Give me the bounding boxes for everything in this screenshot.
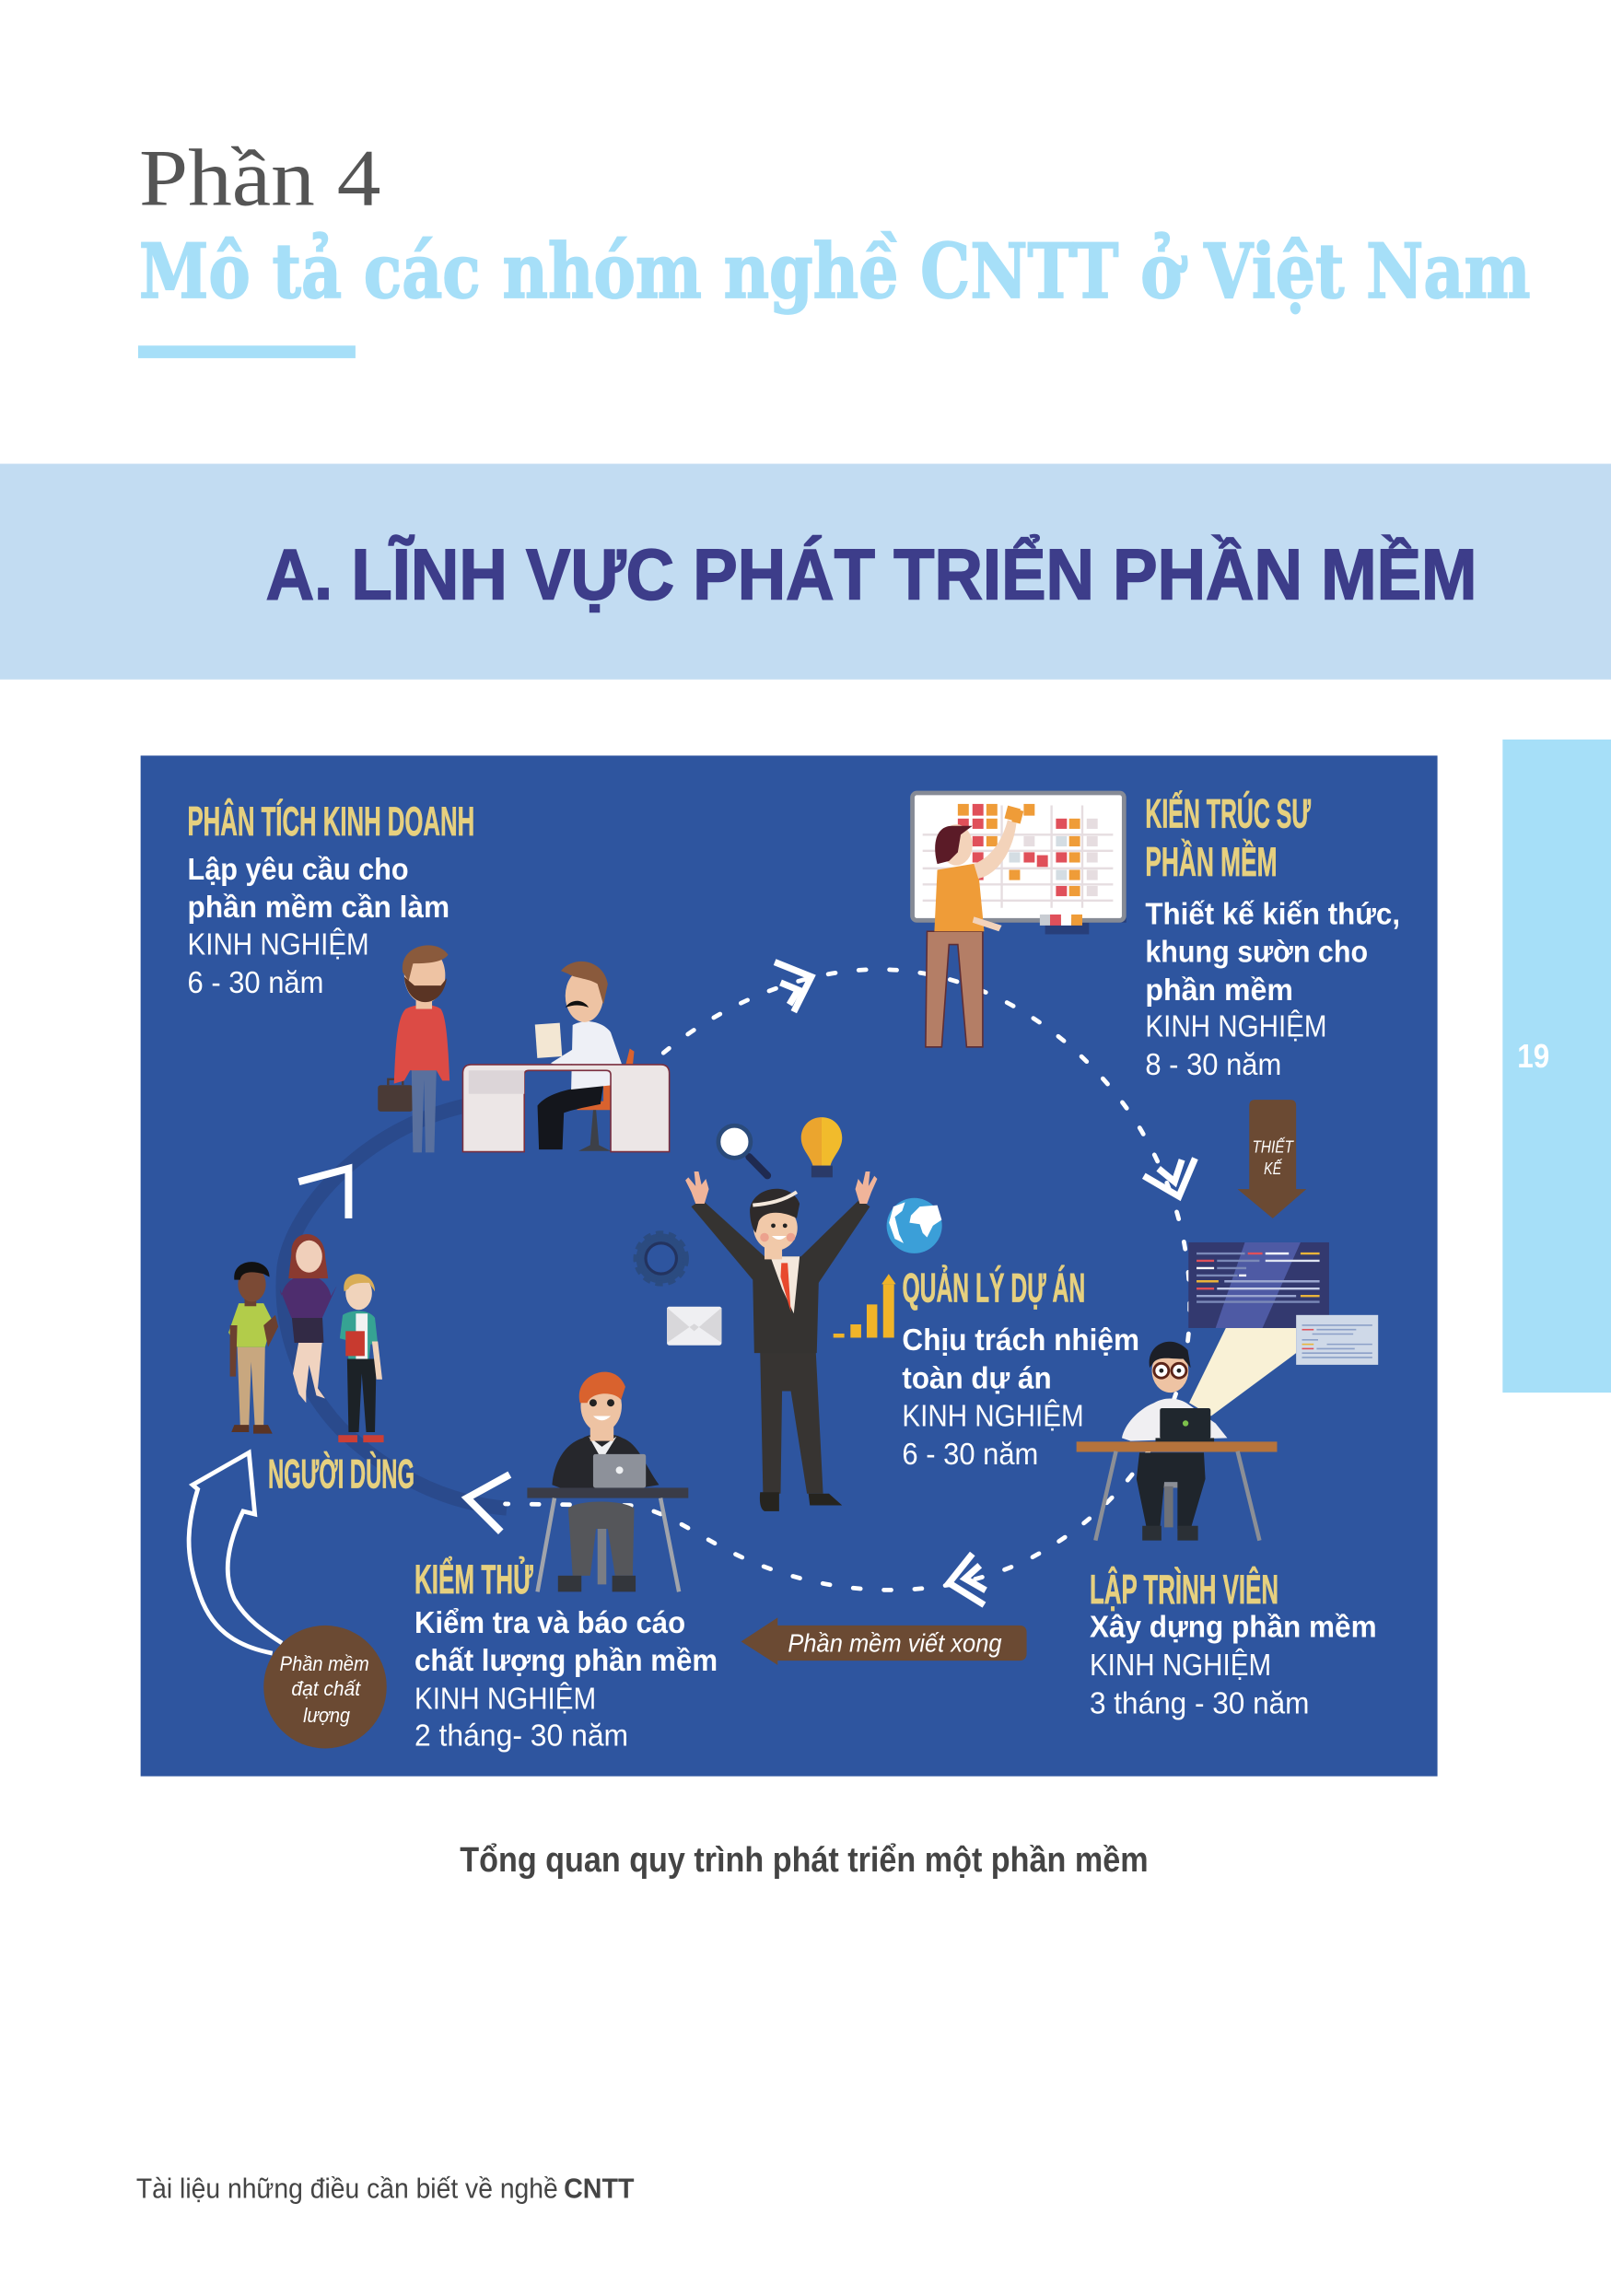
user: woman bbox=[280, 1234, 337, 1403]
whiteboard bbox=[913, 793, 1127, 934]
text block: programmer: 3 tháng - 30 năm bbox=[1090, 1686, 1309, 1720]
flow arrow: finished software bbox=[741, 1617, 1027, 1665]
programmer figure bbox=[1077, 1342, 1277, 1541]
caption: Tổng quan quy trình phát triển một phần mềm bbox=[460, 1840, 1149, 1880]
arrow label: THIẾT bbox=[1252, 1136, 1295, 1156]
user group figures bbox=[228, 1234, 384, 1442]
arrow: to architect bbox=[775, 962, 811, 1012]
text block: software architect: Thiết kế kiến thức, bbox=[1145, 897, 1400, 931]
icon: light bulb bbox=[801, 1117, 842, 1177]
text block: software architect: 8 - 30 năm bbox=[1145, 1048, 1281, 1082]
text block: programmer bbox=[1090, 1567, 1377, 1720]
curved outline arrow: quality software to users bbox=[189, 1452, 282, 1653]
text block: software architect: KINH NGHIỆM bbox=[1145, 1009, 1327, 1044]
text block: business analyst: phần mềm cần làm bbox=[188, 891, 449, 925]
text block: project manager: 6 - 30 năm bbox=[902, 1438, 1038, 1472]
dark arc: users to business analysis bbox=[283, 1105, 507, 1509]
page number tab bbox=[1502, 740, 1611, 1393]
project manager figure bbox=[685, 1171, 877, 1511]
icon: gear bbox=[636, 1233, 686, 1283]
badge: quality software bbox=[263, 1626, 387, 1748]
footer: Tài liệu những điều cần biết về nghề bbox=[136, 2174, 558, 2205]
text block: project manager: Chịu trách nhiệm bbox=[902, 1323, 1139, 1358]
tester figure bbox=[527, 1372, 688, 1591]
user: boy bbox=[338, 1274, 384, 1442]
code sheet bbox=[1296, 1315, 1378, 1365]
section band bbox=[0, 464, 1611, 680]
text block: software architect: KIẾN TRÚC SƯ bbox=[1145, 790, 1311, 836]
flow arrow label: Phần mềm viết xong bbox=[788, 1629, 1002, 1658]
footer: CNTT bbox=[564, 2174, 635, 2205]
arrow: to users bbox=[467, 1474, 509, 1532]
icon: magnifier bbox=[718, 1125, 767, 1175]
text block: software architect: phần mềm bbox=[1145, 973, 1293, 1008]
badge: quality software: đạt chất bbox=[291, 1677, 361, 1700]
text block: software architect bbox=[1145, 790, 1400, 1082]
text block: project manager: QUẢN LÝ DỰ ÁN bbox=[902, 1265, 1085, 1311]
title underline bbox=[138, 345, 356, 358]
text block: tester: KINH NGHIỆM bbox=[414, 1682, 596, 1717]
arrow: users to business analyst bbox=[298, 1169, 348, 1218]
design flow arrow: KẾ bbox=[1264, 1159, 1283, 1178]
text block: tester bbox=[414, 1556, 718, 1753]
dashed process cycle bbox=[506, 970, 1190, 1590]
process diagram panel bbox=[141, 755, 1438, 1777]
text block: business analyst: PHÂN TÍCH KINH DOANH bbox=[188, 798, 474, 845]
page number: 19 bbox=[1517, 1037, 1549, 1075]
white desk bbox=[462, 1065, 670, 1152]
text block: business analyst: KINH NGHIỆM bbox=[188, 927, 369, 962]
text block: project manager bbox=[902, 1265, 1139, 1472]
analyst chair bbox=[577, 1048, 634, 1110]
text block: tester: Kiểm tra và báo cáo bbox=[414, 1606, 685, 1640]
badge: quality software: lượng bbox=[303, 1704, 351, 1727]
text block: programmer: KINH NGHIỆM bbox=[1090, 1648, 1271, 1683]
badge: quality software: Phần mềm bbox=[280, 1652, 369, 1675]
seated analyst bbox=[535, 962, 623, 1151]
text block: project manager: toàn dự án bbox=[902, 1361, 1052, 1395]
arrow: to programmer bbox=[1144, 1159, 1195, 1196]
arrow: to tester bbox=[949, 1554, 986, 1605]
text block: project manager: KINH NGHIỆM bbox=[902, 1399, 1084, 1434]
user: man bbox=[228, 1262, 278, 1434]
text block: business analyst: Lập yêu cầu cho bbox=[188, 853, 409, 887]
section label: Phần 4: Phần 4 bbox=[139, 134, 380, 223]
text block: software architect: khung sườn cho bbox=[1145, 936, 1368, 970]
icon: globe bbox=[887, 1198, 942, 1253]
architect figure bbox=[926, 809, 1023, 1047]
section heading: A. LĨNH VỰC PHÁT TRIỂN PHẦN MỀM bbox=[266, 533, 1477, 614]
text block: programmer: LẬP TRÌNH VIÊN bbox=[1090, 1567, 1278, 1613]
code screen bbox=[1188, 1242, 1329, 1328]
icon: growth chart bbox=[834, 1274, 896, 1337]
text block: business analyst: 6 - 30 năm bbox=[188, 966, 323, 1000]
label: users: NGƯỜI DÙNG bbox=[268, 1451, 414, 1497]
text block: tester: KIỂM THỬ bbox=[414, 1556, 533, 1603]
projector light beam bbox=[1189, 1328, 1296, 1416]
text block: tester: chất lượng phần mềm bbox=[414, 1644, 718, 1678]
text block: programmer: Xây dựng phần mềm bbox=[1090, 1611, 1377, 1645]
text block: software architect: PHẦN MỀM bbox=[1145, 839, 1277, 885]
text block: tester: 2 tháng- 30 năm bbox=[414, 1719, 628, 1753]
design flow arrow bbox=[1238, 1100, 1306, 1218]
icon: envelope bbox=[667, 1307, 721, 1346]
business analyst figure bbox=[378, 945, 449, 1152]
text block: business analyst bbox=[188, 798, 474, 1000]
